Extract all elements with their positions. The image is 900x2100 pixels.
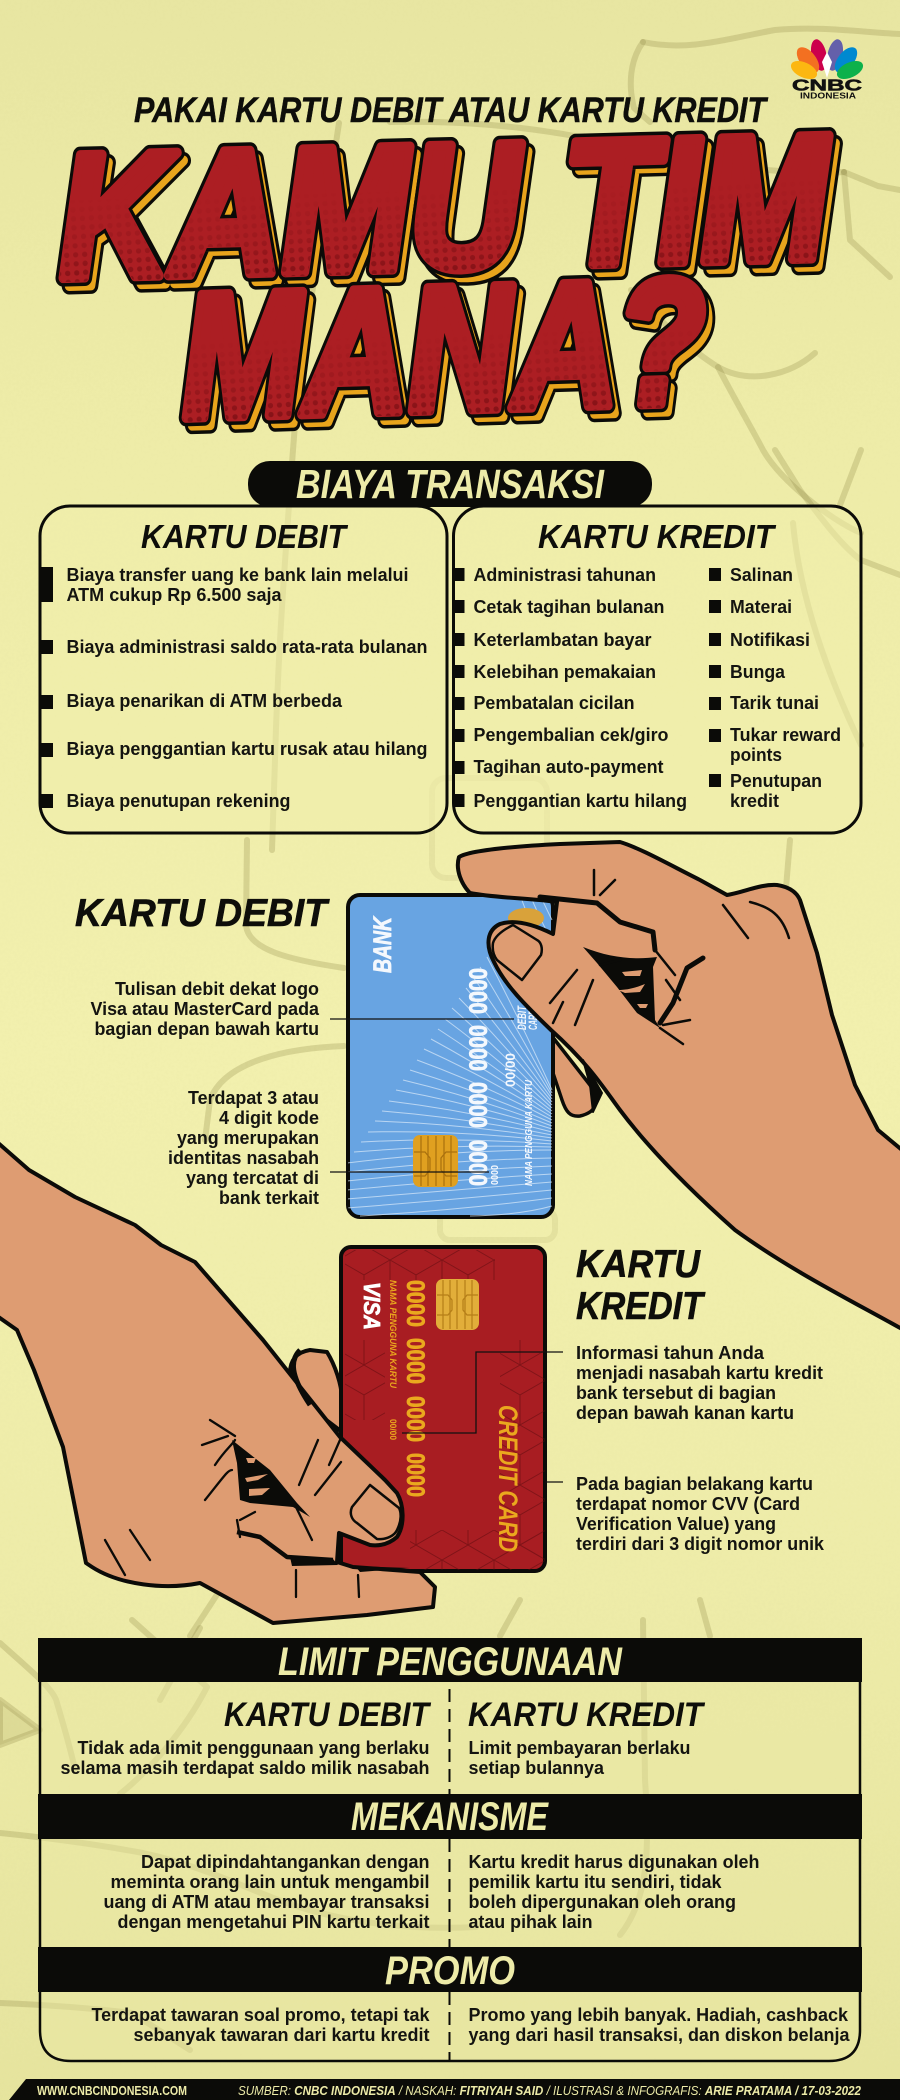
subtitle: PAKAI KARTU DEBIT ATAU KARTU KREDIT (134, 91, 768, 130)
row: limit penggunaan: LIMIT PENGGUNAAN (278, 1640, 623, 1684)
panel: kartu kredit fees: Penggantian kartu hilang (474, 791, 687, 811)
illustration: credit card (341, 1247, 545, 1571)
panel: kartu kredit fees: Pembatalan cicilan (474, 693, 634, 713)
panel: kartu kredit fees: Materai (730, 597, 792, 617)
section: biaya transaksi (40, 461, 861, 833)
card text: 00/00 (502, 1053, 518, 1087)
callout: year info (402, 1343, 823, 1433)
panel: kartu debit fees: KARTU DEBIT (141, 518, 349, 555)
panel: comparison table (38, 1638, 862, 2061)
callout: cvv: Verification Value) yang (576, 1514, 776, 1534)
thumbnail (493, 925, 542, 980)
panel: kartu kredit fees: Cetak tagihan bulanan (474, 597, 664, 617)
table frame (40, 1640, 860, 2061)
panel: kartu kredit fees: Kelebihan pemakaian (474, 662, 656, 682)
panel: kartu kredit fees: Notifikasi (730, 630, 810, 650)
footer bar: WWW.CNBCINDONESIA.COM (37, 2083, 187, 2098)
heading: kartu debit: KARTU DEBIT (75, 892, 330, 935)
row: limit penggunaan: KARTU DEBIT (224, 1696, 432, 1734)
callout: card code (168, 1088, 489, 1208)
row: promo: yang dari hasil transaksi, dan diskon belanja (468, 2025, 850, 2045)
panel: kartu debit fees: Biaya penggantian kartu rusak atau hilang (66, 739, 428, 759)
card text: 0000 (465, 1140, 493, 1186)
icon: peacock feathers (788, 38, 866, 83)
row: mekanisme: uang di ATM atau membayar transaksi (104, 1892, 430, 1912)
callout: card code: Terdapat 3 atau (188, 1088, 319, 1108)
panel: kartu kredit fees (454, 506, 861, 833)
row: limit penggunaan: setiap bulannya (468, 1758, 605, 1778)
row: mekanisme: dengan mengetahui PIN kartu terkait (118, 1912, 430, 1932)
row: limit penggunaan: selama masih terdapat saldo milik nasabah (60, 1758, 430, 1778)
row: mekanisme: meminta orang lain untuk mengambil (110, 1872, 430, 1892)
card chip (413, 1135, 458, 1187)
row: promo: sebanyak tawaran dari kartu kredit (134, 2025, 430, 2045)
title line 2: MANA? (178, 241, 709, 456)
panel: kartu kredit fees: Keterlambatan bayar (474, 630, 652, 650)
callout: card code: yang tercatat di (186, 1168, 319, 1188)
title line 2: MANA? (185, 249, 715, 464)
callout: cvv: Pada bagian belakang kartu (576, 1474, 813, 1494)
callout: card code: 4 digit kode (219, 1108, 319, 1128)
row: promo: PROMO (385, 1949, 515, 1993)
card text (369, 915, 540, 1186)
row: mekanisme: atau pihak lain (468, 1912, 592, 1932)
row: mekanisme: MEKANISME (351, 1795, 549, 1839)
callout: card code: bank terkait (219, 1188, 319, 1208)
panel: kartu debit fees: ATM cukup Rp 6.500 saja (66, 585, 282, 605)
callout: year info: depan bawah kanan kartu (576, 1403, 794, 1423)
heading: kartu kredit (576, 1243, 706, 1328)
card chip (436, 1279, 479, 1330)
callout: debit text (90, 979, 514, 1039)
row: mekanisme: boleh dipergunakan oleh orang (468, 1892, 736, 1912)
panel: kartu debit fees: Biaya transfer uang ke bank lain melalui (66, 565, 408, 585)
title line 2: MANA? (178, 241, 709, 456)
title line 2: MANA? (185, 249, 715, 464)
card gold logo (508, 908, 544, 928)
thumbnail (351, 1485, 401, 1539)
card swirl pattern (347, 895, 552, 1216)
card text: CREDIT CARD (493, 1405, 523, 1552)
panel: kartu kredit fees: Bunga (730, 662, 786, 682)
card text: 0000 (401, 1396, 429, 1442)
row: limit penggunaan: Limit pembayaran berlaku (468, 1738, 690, 1758)
panel: kartu kredit fees: Administrasi tahunan (474, 565, 656, 585)
card text: NAMA PENGGUNA KARTU (387, 1280, 398, 1389)
illustration: lower left hand (0, 1142, 435, 1623)
callout: year info: bank tersebut di bagian (576, 1383, 776, 1403)
card text (359, 1280, 523, 1552)
card text: DEBIT (515, 1005, 529, 1030)
logo: CNBC Indonesia: INDONESIA (800, 92, 856, 100)
card text: 0000 (401, 1453, 429, 1497)
panel: kartu kredit fees: Tagihan auto-payment (474, 757, 664, 777)
callout: debit text: Tulisan debit dekat logo (115, 979, 319, 999)
card cube pattern (345, 1250, 545, 1570)
callout: card code: identitas nasabah (168, 1148, 319, 1168)
callout: debit text: bagian depan bawah kartu (94, 1019, 319, 1039)
card text: BANK (369, 915, 397, 973)
card text: NAMA PENGGUNA KARTU (524, 1079, 535, 1186)
illustration: debit card (347, 895, 553, 1217)
row: limit penggunaan: Tidak ada limit penggunaan yang berlaku (78, 1738, 430, 1758)
callout: year info: menjadi nasabah kartu kredit (576, 1363, 823, 1383)
panel: kartu kredit fees: points (730, 745, 782, 765)
finger creases and shadow (583, 947, 660, 1028)
row: mekanisme (38, 1794, 862, 1932)
panel: kartu debit fees: Biaya administrasi saldo rata-rata bulanan (66, 637, 428, 657)
card text: 0000 (465, 968, 493, 1014)
row: mekanisme: pemilik kartu itu sendiri, tidak (468, 1872, 722, 1892)
panel: kartu debit fees: Biaya penutupan rekening (66, 791, 290, 811)
panel: kartu debit fees: Biaya penarikan di ATM berbeda (66, 691, 343, 711)
title: KAMU TIM MANA? (56, 127, 843, 434)
heading: kartu kredit: KARTU (576, 1243, 701, 1286)
panel: kartu kredit fees: KARTU KREDIT (538, 518, 777, 555)
panel: kartu debit fees (40, 506, 447, 833)
row: promo: Promo yang lebih banyak. Hadiah, cashback (468, 2005, 849, 2025)
finger shadow and creases (232, 1440, 310, 1517)
pill heading: BIAYA TRANSAKSI (296, 461, 605, 507)
panel: kartu kredit fees: Tarik tunai (730, 693, 819, 713)
illustration: top right hand (458, 842, 900, 1329)
panel: kartu kredit fees: Salinan (730, 565, 793, 585)
card text: 0000 (490, 1165, 501, 1185)
illustration: hand pinky behind debit card (551, 1035, 596, 1116)
logo: CNBC Indonesia (788, 38, 866, 100)
row: limit penggunaan: KARTU KREDIT (468, 1696, 706, 1734)
footer bar (9, 2079, 900, 2100)
row: promo (38, 1947, 862, 2045)
card text: 0000 (465, 1025, 493, 1071)
panel: kartu kredit fees: Pengembalian cek/giro (474, 725, 668, 745)
card text: VISA (359, 1282, 385, 1330)
callout: cvv: terdapat nomor CVV (Card (576, 1494, 800, 1514)
footer bar: SUMBER: CNBC INDONESIA / NASKAH: FITRIYAH SAID / ILUSTRASI & INFOGRAFIS: ARIE PRATAMA / 17-03-2022 (238, 2083, 862, 2098)
title line 2 (178, 270, 716, 434)
card text: 0000 (401, 1280, 429, 1327)
panel: kartu kredit fees: kredit (730, 791, 779, 811)
row: limit penggunaan (38, 1638, 862, 1778)
callout: debit text: Visa atau MasterCard pada (90, 999, 320, 1019)
panel: kartu kredit fees: Penutupan (730, 771, 822, 791)
row: mekanisme: Kartu kredit harus digunakan oleh (468, 1852, 760, 1872)
callout: card code: yang merupakan (177, 1128, 319, 1148)
card text: 0000 (401, 1338, 429, 1384)
row: promo: Terdapat tawaran soal promo, tetapi tak (92, 2005, 430, 2025)
card text: 0000 (465, 1082, 493, 1128)
heading: kartu kredit: KREDIT (576, 1285, 706, 1328)
row: mekanisme: Dapat dipindahtangankan dengan (141, 1852, 430, 1872)
card text: 00/00 (388, 1419, 398, 1440)
logo: CNBC Indonesia: CNBC (792, 78, 863, 94)
callout: cvv (545, 1474, 825, 1554)
title line 2: MANA? (178, 241, 709, 456)
card text: CARD (526, 1010, 540, 1030)
panel: kartu kredit fees: Tukar reward (730, 725, 841, 745)
callout: cvv: terdiri dari 3 digit nomor unik (576, 1534, 825, 1554)
callout: year info: Informasi tahun Anda (576, 1343, 765, 1363)
illustration: finger behind credit card (290, 1350, 342, 1432)
